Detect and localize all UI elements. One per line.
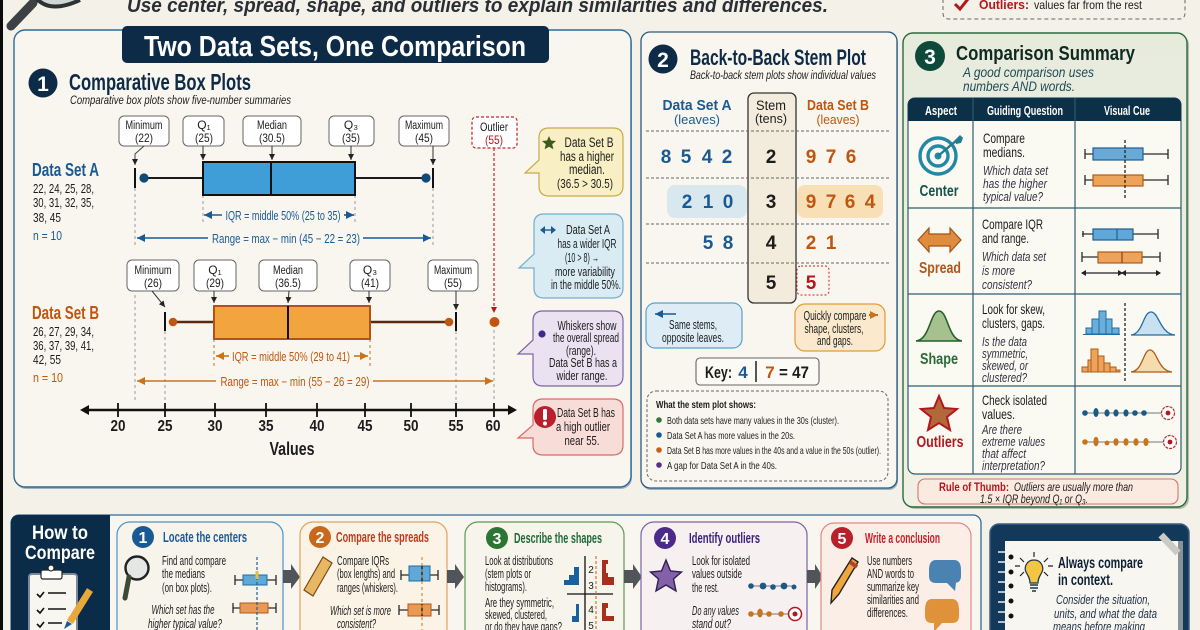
row: shape: Shape [920,351,958,368]
number line axis: Values [270,439,314,459]
step 3: describe the shapes: 3 [588,581,594,592]
five-number labels A: (35) [342,131,360,145]
callout: whiskers: the overall spread [553,331,619,345]
step 2: compare the spreads: Which set is more [330,604,391,618]
callout: high outlier: a high outlier [556,420,610,434]
heading: section 2: 2 [657,49,669,72]
icon: header magnifying glass [11,0,80,26]
heading: section 2 [648,44,876,82]
number line axis [80,403,517,459]
callout: wider IQR: (10 > 8) → [565,251,599,265]
step 1: locate the centers: Which set has the [152,603,215,617]
callout: whiskers [518,311,623,386]
five-number labels B: (41) [361,276,379,290]
stem plot table: 5 [766,273,777,294]
row: center: medians. [983,144,1025,160]
stem plot table [646,93,890,303]
five-number labels B [127,260,478,310]
stem plot table: 8 [661,147,671,168]
what the stem plot shows [647,391,888,481]
number line axis: 45 [358,418,373,435]
callout: whiskers: wider range. [556,369,608,383]
IQR and range annotation A: Range = max − min (45 − 22 = 23) [212,232,360,246]
step 3: describe the shapes: Look at distributions [485,554,553,568]
data set A list: 22, 24, 25, 28, [33,181,94,196]
row: shape: skewed, or [982,358,1028,373]
callout: whiskers: (range). [566,344,596,358]
five-number labels B: (36.5) [275,276,301,290]
step 4: identify outliers: values outside [692,567,742,581]
stem plot key: 4 [738,363,748,382]
stem plot table: 5 [681,147,692,168]
callout: wider IQR: Data Set A [566,223,610,237]
row: spread [918,216,1161,292]
callout: higher median [525,128,623,196]
heading: section 1 [28,68,291,107]
stem plot table: 7 [826,147,836,168]
stem plot table: 8 [723,233,733,254]
summary table: Guiding Question [987,103,1063,118]
step 1: locate the centers: 1 [139,530,148,547]
panel: back-to-back stem plot [641,32,898,490]
arrow: step 4 to 5 [807,564,823,589]
stem plot table: 0 [723,192,733,213]
stem plot table: (tens) [755,111,787,126]
step 2: compare the spreads: 2 [316,530,325,547]
row: center: Center [920,183,958,200]
data set B list [32,303,99,385]
box plot A [135,162,433,247]
step 4: identify outliers: 4 [661,531,670,548]
data set B list: 26, 27, 29, 34, [33,324,94,339]
number line axis: 30 [208,418,223,435]
five-number labels A: (45) [415,131,433,145]
box plot B [135,295,500,402]
what the stem plot shows: Both data sets have many values in the 30s (cluster). [667,415,839,427]
sidebar: how to compare [11,515,110,630]
arrow: step 3 to 4 [624,564,642,589]
card: always compare in context [990,524,1189,630]
outlier label [472,117,517,313]
row: outliers: Check isolated [982,392,1047,408]
callout: higher median: Data Set B [564,135,614,150]
row: center: has the higher [983,176,1048,191]
step 3: describe the shapes: histograms). [485,580,527,594]
row: outliers: Are there [981,422,1022,437]
row: center: Which data set [983,163,1049,178]
stem plot table: 1 [826,233,837,254]
stem plot table: 4 [702,147,713,168]
step 4: identify outliers: Look for isolated [692,554,750,568]
step 2: compare the spreads [300,522,447,630]
heading: section 1: Comparative Box Plots [69,69,251,95]
row: shape [916,301,1175,385]
row: spread: Compare IQR [982,216,1043,232]
step 1: locate the centers: the medians [162,567,205,581]
step 5: write a conclusion: Use numbers [867,554,912,568]
callout: wider IQR: has a wider IQR [558,237,616,251]
heading: section 1: 1 [37,73,49,96]
callout: high outlier: Data Set B has [557,406,615,420]
stem plot table: 9 [806,147,816,168]
card: always compare in context: units, and what the data [1054,606,1157,621]
number line axis: 60 [486,418,501,435]
row: shape: symmetric, [982,346,1028,361]
stem plot table: 5 [806,273,817,294]
note: quickly compare: and gaps. [817,334,853,348]
row: outliers [916,392,1176,473]
callout: wider IQR [519,214,623,298]
stem plot table: 6 [845,192,855,213]
panel: how to compare [11,515,981,630]
step 5: write a conclusion: summarize key [867,580,919,594]
five-number labels A: Maximum [405,120,443,132]
row: center [920,130,1168,204]
step 4: identify outliers: the rest. [692,581,719,595]
callout: wider IQR: more variability [555,265,616,279]
step 4: identify outliers [641,522,807,630]
step 2: compare the spreads: ranges (whiskers). [337,581,398,595]
rule of thumb: Rule of Thumb: [939,480,1009,494]
note: same stems [646,303,742,348]
step 4: identify outliers: Identify outliers [689,531,760,547]
row: spread: and range. [982,230,1029,246]
five-number labels A: Median [257,120,287,132]
heading: section 3 [915,41,1135,94]
summary table: Visual Cue [1104,103,1150,118]
stem plot table: 4 [766,233,777,254]
what the stem plot shows: Data Set B has more values in the 40s and a value in the 50s (outlier). [667,445,881,457]
stem plot key: 7 [765,363,775,382]
step 1: locate the centers: (on box plots). [162,581,212,595]
what the stem plot shows: What the stem plot shows: [656,399,756,411]
data set B list: Data Set B [32,303,99,323]
banner title: Two Data Sets, One Comparison [144,31,526,63]
callout: high outlier [518,399,623,455]
stem plot table: 2 [682,192,692,213]
step 1: locate the centers: Find and compare [162,554,226,568]
callout: higher median: has a higher [560,149,614,164]
step 2: compare the spreads: (box lengths) and [337,567,395,581]
callout: high outlier: near 55. [564,434,600,448]
callout: wider IQR: in the middle 50%. [551,278,621,292]
callout: whiskers: Data Set B has a [549,356,617,370]
step 1: locate the centers: Locate the centers [163,530,247,546]
note: same stems: opposite leaves. [662,331,724,345]
stem plot table: 6 [846,147,856,168]
five-number labels A: (30.5) [259,131,285,145]
outlier label: Outlier [480,122,508,134]
five-number labels A: (25) [195,131,213,145]
row: spread: consistent? [982,277,1033,292]
IQR and range annotation B: Range = max − min (55 − 26 = 29) [220,375,370,389]
five-number labels A: Q₁ [197,118,211,132]
row: shape: clusters, gaps. [982,315,1045,331]
row: spread: Spread [919,260,961,277]
stem plot table: 2 [806,233,816,254]
callout: whiskers: Whiskers show [558,319,617,333]
note: quickly compare [795,304,885,351]
heading: section 3: numbers AND words. [963,79,1075,94]
row: shape: Is the data [982,334,1027,349]
stem plot table: Data Set B [807,97,869,114]
data set A list: n = 10 [33,228,62,243]
stem plot table: Data Set A [662,97,732,114]
data set A list: Data Set A [32,160,99,180]
stem plot table: 9 [806,192,816,213]
five-number labels B: (29) [206,276,224,290]
sidebar: how to compare: Compare [25,542,95,564]
row: outliers: that affect [982,446,1027,461]
step 3: describe the shapes: 3 [493,531,502,548]
row: outliers: values. [982,406,1015,422]
row: spread: is more [982,263,1015,278]
row: outliers: extreme values [982,434,1045,449]
IQR and range annotation A: IQR = middle 50% (25 to 35) [226,209,340,223]
row: outliers: Outliers [916,434,964,451]
callout: higher median: median. [569,162,605,177]
step 5: write a conclusion: AND words to [867,567,914,581]
arrow: step 2 to 3 [447,564,464,589]
panel: comparative box plots [14,26,632,489]
row: outliers: interpretation? [982,458,1046,473]
callout: higher median: (36.5 > 30.5) [557,177,613,191]
step 2: compare the spreads: Compare IQRs [337,554,389,568]
step 3: describe the shapes: 2 [588,565,594,576]
heading: section 3: 3 [924,46,936,69]
IQR and range annotation A [137,209,431,246]
note: quickly compare: shape, clusters, [804,322,864,336]
heading: section 2: Back-to-back stem plots show individual values [690,70,876,82]
row: spread: Which data set [982,249,1047,264]
stem plot table: 4 [865,192,876,213]
data set A list: 38, 45 [33,210,61,225]
outlier label: (55) [485,133,503,147]
step 5: write a conclusion: 5 [838,531,847,548]
heading: section 3: A good comparison uses [962,65,1094,80]
panel: comparison summary [903,33,1189,509]
five-number labels B: Median [273,265,303,277]
card: always compare in context: Always compare [1058,555,1143,572]
what the stem plot shows: A gap for Data Set A in the 40s. [667,460,777,472]
step 2: compare the spreads: Compare the spreads [336,530,429,546]
heading: section 1: Comparative box plots show five-number summaries [70,93,291,107]
stem plot table: 7 [826,192,836,213]
five-number labels B: (55) [444,276,462,290]
note: same stems: Same stems, [669,318,717,332]
rule of thumb: Outliers are usually more than [1014,480,1133,494]
five-number labels A: (22) [135,131,153,145]
stem plot key: Key: [705,364,732,382]
stem plot key [696,358,819,385]
five-number labels B: Q₃ [363,263,377,277]
row: center: typical value? [983,189,1044,204]
five-number labels A: Minimum [126,120,162,132]
heading: section 3: Comparison Summary [956,42,1135,65]
data set A list [32,160,99,243]
number line axis: 25 [158,418,173,435]
row: center: Compare [983,130,1025,146]
IQR and range annotation B [137,350,493,389]
rule of thumb [918,479,1178,506]
stem plot table: (leaves) [816,112,860,127]
note: quickly compare: Quickly compare [804,309,867,323]
legend box: outliers [943,0,1185,19]
what the stem plot shows: Data Set A has more values in the 20s. [667,430,795,442]
step 3: describe the shapes: skewed, clustered, [485,608,547,622]
IQR and range annotation B: IQR = middle 50% (29 to 41) [232,350,350,364]
row: shape: clustered? [982,370,1028,385]
step 3: describe the shapes [465,522,624,630]
data set B list: 42, 55 [33,352,61,367]
step 3: describe the shapes: (stem plots or [485,567,531,581]
card: always compare in context: Consider the situation, [1056,592,1150,607]
stem plot key: = 47 [779,364,809,382]
arrow: step 1 to 2 [283,564,300,589]
number line axis: 40 [310,418,325,435]
notebook spiral [998,552,1014,622]
five-number labels A: Q₃ [344,118,358,132]
icon: light bulb [1015,552,1053,591]
step 5: write a conclusion [821,523,971,630]
number line axis: 20 [110,418,126,435]
stem plot table: 3 [766,192,776,213]
step 3: describe the shapes: Are they symmetric, [485,596,554,610]
number line axis: 55 [448,418,464,435]
summary table [908,98,1181,474]
stem plot table: (leaves) [674,112,720,127]
five-number labels B: Minimum [134,265,172,277]
card: always compare in context: in context. [1058,572,1113,589]
data set B list: n = 10 [33,370,63,385]
step 5: write a conclusion: similarities and [867,593,919,607]
summary table: Aspect [925,103,957,118]
number line axis: 35 [258,418,274,435]
stem plot table: 2 [722,147,732,168]
data set B list: 36, 37, 39, 41, [33,338,94,353]
sidebar: how to compare: How to [32,522,88,544]
step 3: describe the shapes: 4 [588,605,594,616]
step 4: identify outliers: Do any values [692,604,739,618]
row: shape: Look for skew, [982,301,1045,317]
step 3: describe the shapes: Describe the shapes [514,531,602,547]
heading: section 2: Back-to-Back Stem Plot [690,45,866,70]
step 1: locate the centers [117,522,283,630]
data set A list: 30, 31, 32, 35, [33,195,94,210]
number line axis: 50 [404,418,419,435]
rule of thumb: 1.5 × IQR beyond Q₁ or Q₃. [980,492,1088,506]
stem plot table: 1 [703,192,714,213]
five-number labels B: Q₁ [208,263,222,277]
step 5: write a conclusion: Write a conclusion [865,531,940,547]
five-number labels A [119,116,449,165]
stem plot table: Stem [756,98,786,113]
five-number labels B: Maximum [434,265,472,277]
stem plot table: 2 [766,147,776,168]
stem plot table: 5 [703,233,714,254]
step 5: write a conclusion: differences. [867,606,908,620]
five-number labels B: (26) [144,276,162,290]
